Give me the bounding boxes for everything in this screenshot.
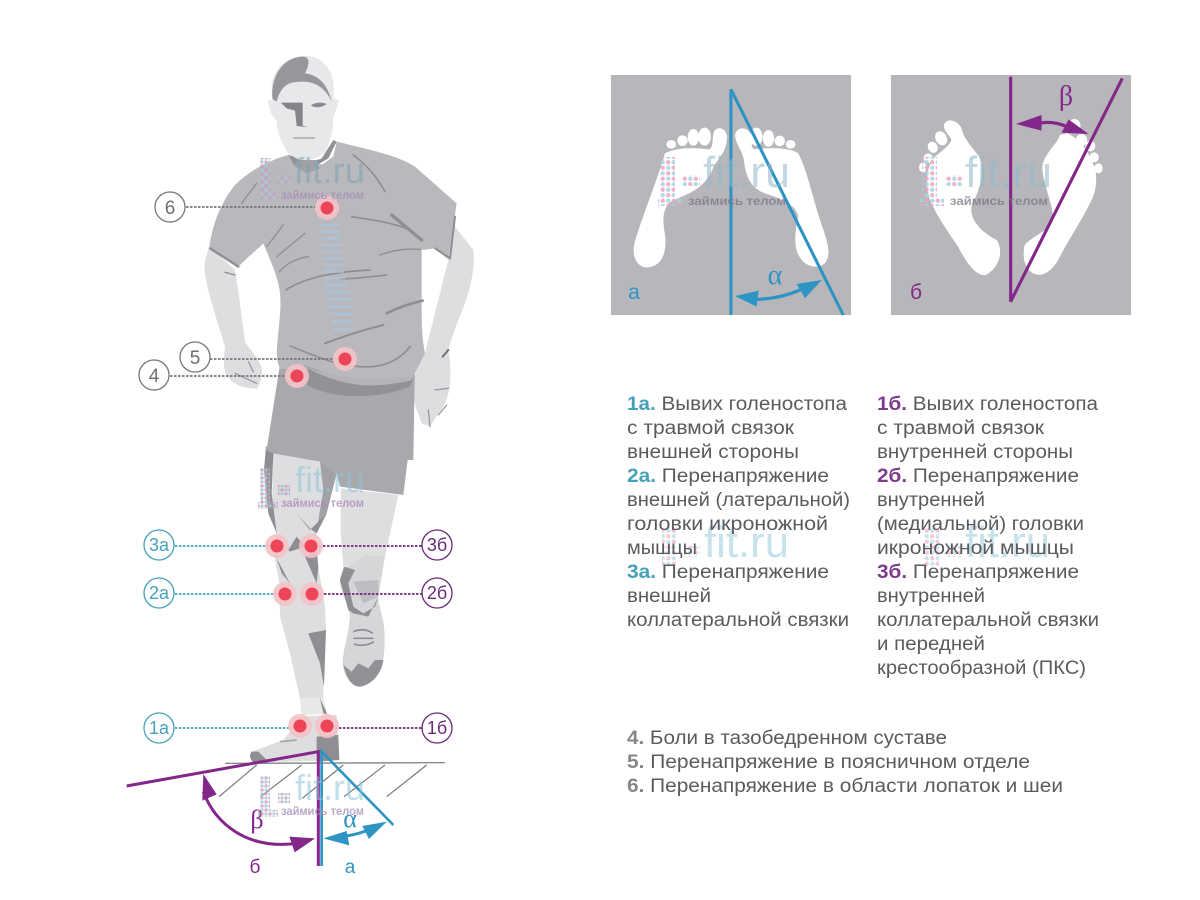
waistband: [305, 368, 413, 396]
shirt: [209, 142, 457, 378]
text block: column б: 3б. Перенапряжение: [877, 562, 1079, 583]
panel: feet б: [891, 75, 1131, 315]
shirt folds: [210, 155, 455, 367]
watermark: ground: займись телом: [281, 804, 364, 818]
standing shoe: [250, 698, 339, 763]
text block: column а: [627, 394, 850, 631]
text block: column а: 1а. Вывих голеностопа: [627, 394, 847, 415]
watermark: torso: займись телом: [281, 188, 364, 202]
marker 3а: 3а: [149, 535, 170, 555]
panel letter а: а: [628, 281, 640, 304]
text block: general pains: 5. Перенапряжение в поясничном отделе: [627, 752, 1030, 773]
watermark: thigh: fit.ru: [295, 459, 365, 500]
beta letter: β: [1059, 81, 1073, 112]
head: [268, 56, 339, 160]
watermark: feet б: займись телом: [950, 194, 1048, 208]
text block: column б: 1б. Вывих голеностопа: [877, 394, 1098, 415]
text block: column а: внешней (латеральной): [627, 490, 850, 511]
text block: column а: внешней стороны: [627, 442, 799, 463]
angle alpha lines: [322, 752, 393, 866]
label а, figure: а: [345, 857, 356, 878]
standing leg: [272, 453, 335, 698]
text block: column а: внешней: [627, 586, 711, 607]
text block: general pains: [627, 728, 1063, 797]
feet prints а: [634, 128, 828, 267]
callout leaders: [170, 207, 422, 728]
text block: column б: с травмой связок: [877, 418, 1045, 439]
raised shoe: [340, 555, 385, 687]
panel letter б: б: [910, 281, 922, 304]
leg shadows: [264, 450, 337, 687]
spine: [320, 225, 354, 329]
shorts lower: [266, 447, 409, 495]
watermark: text column б: fit.ru: [965, 518, 1050, 567]
panel: feet а: [611, 75, 851, 315]
shorts upper: [265, 360, 415, 460]
text block: column а: с травмой связок: [627, 418, 795, 439]
raised leg: [341, 488, 398, 567]
watermark: torso: [258, 150, 365, 202]
marker 5: 5: [190, 348, 200, 369]
text block: general pains: 6. Перенапряжение в области лопаток и шеи: [627, 776, 1063, 797]
marker 3б: 3б: [427, 535, 447, 555]
alpha letter: α: [768, 260, 783, 291]
text block: general pains: 4. Боли в тазобедренном суставе: [627, 728, 947, 749]
text block: column б: [877, 394, 1099, 679]
marker 2а: [144, 578, 174, 608]
angle letter: beta, figure: β: [250, 805, 264, 834]
watermark: feet б: [920, 148, 1052, 208]
angle letter: alpha, figure: α: [343, 804, 357, 833]
marker 2б: [422, 578, 452, 608]
feet prints б: [919, 119, 1103, 275]
watermark: ground: [258, 767, 365, 818]
marker 2б: 2б: [427, 583, 447, 603]
marker 5: [180, 342, 210, 372]
angle alpha, feet: [731, 89, 843, 315]
watermark: thigh: займись телом: [281, 496, 364, 510]
text block: column а: мышцы: [627, 538, 697, 559]
text block: column б: внутренней: [877, 586, 985, 607]
ground hatching: [219, 763, 445, 798]
watermark: ground: fit.ru: [295, 767, 365, 808]
watermark: feet а: fit.ru: [703, 148, 790, 197]
text block: column б: (медиальной) головки: [877, 514, 1084, 535]
marker 6: [155, 192, 185, 222]
text block: column а: 2а. Перенапряжение: [627, 466, 829, 487]
text block: column а: 3а. Перенапряжение: [627, 562, 829, 583]
watermark: torso: fit.ru: [294, 150, 365, 191]
watermark: feet б: fit.ru: [965, 148, 1052, 197]
pain points: [265, 196, 357, 738]
label б, figure: б: [250, 857, 261, 878]
watermark: text column а: fit.ru: [704, 518, 789, 567]
sock: [300, 698, 327, 715]
text block: column б: 2б. Перенапряжение: [877, 466, 1079, 487]
marker 1а: [144, 713, 174, 743]
marker 3б: [422, 530, 452, 560]
marker 6: 6: [165, 198, 175, 219]
lower body: [127, 447, 445, 866]
marker 2а: 2а: [149, 583, 170, 603]
text block: column б: и передней: [877, 634, 985, 655]
watermark: feet а: займись телом: [688, 194, 786, 208]
runner figure: [127, 56, 474, 866]
watermark: thigh: [258, 459, 365, 510]
marker 1б: 1б: [427, 718, 447, 738]
marker 3а: [144, 530, 174, 560]
collar: [288, 140, 337, 169]
upper body: [204, 56, 474, 460]
angle beta, feet: [1011, 77, 1122, 302]
text block: column а: головки икроножной: [627, 514, 828, 535]
text block: column б: внутренней стороны: [877, 442, 1073, 463]
marker 4: [139, 360, 169, 390]
text block: column б: внутренней: [877, 490, 985, 511]
text block: column б: икроножной мышцы: [877, 538, 1074, 559]
arms: [204, 220, 474, 427]
marker 1а: 1а: [149, 718, 170, 738]
watermark: text column б: [924, 518, 1050, 567]
text block: column а: коллатеральной связки: [627, 610, 849, 631]
watermark: feet а: [658, 148, 790, 208]
text block: column б: крестообразной (ПКС): [877, 658, 1086, 679]
angle beta lines: [127, 752, 318, 866]
marker 4: 4: [149, 366, 160, 387]
marker 1б: [422, 713, 452, 743]
hands detail: [235, 350, 448, 427]
watermark: text column а: [662, 518, 789, 567]
text block: column б: коллатеральной связки: [877, 610, 1099, 631]
